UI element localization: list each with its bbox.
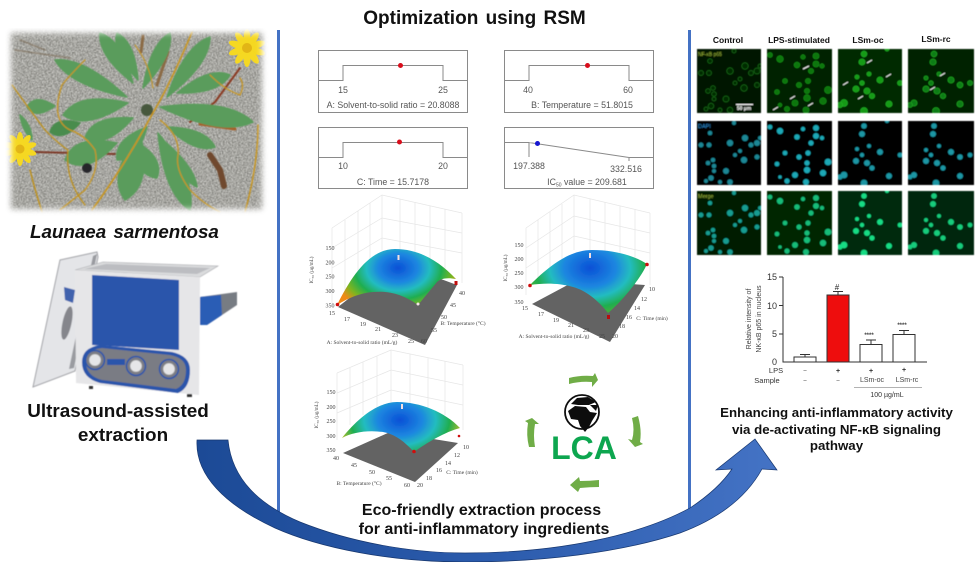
chart: response surface A vs B: 15	[329, 311, 335, 317]
micrograph: LSm-rc DAPI	[907, 120, 975, 186]
label: Ultrasound-assisted extraction: Ultrasound-assisted	[27, 401, 209, 422]
chart: response surface A vs B: 19	[360, 322, 366, 328]
bar: LSm-rc: ****	[897, 323, 907, 329]
chart: response surface A vs C: 350	[514, 300, 524, 306]
chart: response surface A vs C	[504, 195, 668, 342]
bar chart: NF-kB p65 nuclear intensity: 0	[772, 357, 777, 367]
x-axis factor table	[754, 366, 922, 399]
chart: response surface B vs C: 12	[454, 453, 460, 459]
chart: response surface A vs C: 18	[619, 324, 625, 330]
chart: response surface B vs C: 20	[417, 483, 423, 489]
control panel with knobs	[82, 345, 192, 397]
x-axis factor table: LSm-oc	[860, 377, 885, 384]
chart: response surface A vs B: 45	[450, 303, 456, 309]
chart: response surface B vs C: 200	[326, 405, 336, 411]
chart: response surface A vs C: 10	[649, 287, 655, 293]
chart: response surface B vs C: 14	[445, 461, 451, 467]
chart: response surface A vs C: 300	[514, 285, 524, 291]
chart: response surface B vs C: 16	[436, 468, 442, 474]
chart: response surface A vs C: IC₅₀ (µg/mL)	[504, 254, 509, 281]
bar: LSm-oc: ****	[864, 333, 874, 339]
bar: LPS	[827, 283, 849, 362]
bar: LPS: #	[835, 283, 840, 292]
chart: response surface B vs C: B: Temperature (°C)	[336, 480, 382, 487]
chart: response surface A vs C: A: Solvent-to-solid ratio (mL/g)	[519, 333, 590, 340]
x-axis factor table: +	[836, 368, 840, 375]
tank body	[75, 262, 218, 395]
chart: response surface A vs B: 17	[344, 317, 350, 323]
caption: anti-inflammatory activity: pathway	[810, 438, 864, 453]
micrograph: LSm-oc DAPI	[837, 120, 903, 186]
bar: control	[794, 354, 816, 362]
caption: eco-friendly process	[359, 502, 609, 538]
x-axis factor table: −	[803, 378, 807, 385]
chart: response surface A vs B: 60	[421, 339, 427, 345]
chart: response surface B vs C: IC₅₀ (µg/mL)	[315, 401, 320, 428]
chart: response surface A vs B: 250	[326, 274, 334, 280]
chart: response surface A vs B: 23	[392, 333, 398, 339]
panel: desirability A: 15	[338, 85, 348, 95]
panel: desirability B: 60	[623, 85, 633, 95]
x-axis factor table: LPS	[769, 366, 783, 375]
panel: desirability A	[318, 50, 468, 112]
micrograph: LSm-rc NF-kB	[907, 48, 975, 114]
chart: response surface A vs B: 200	[326, 260, 334, 266]
x-axis factor table: Sample	[754, 376, 780, 385]
chart: response surface A vs C: C: Time (min)	[636, 315, 668, 322]
chart: response surface A vs C: 16	[626, 315, 632, 321]
chart: response surface B vs C: 250	[326, 419, 336, 425]
micrograph: LSm-oc merge	[837, 190, 903, 256]
caption: eco-friendly process: for anti-inflammatory ingredients	[359, 521, 609, 538]
label: Ultrasound-assisted extraction: extraction	[78, 425, 168, 446]
panel: desirability A: A: Solvent-to-solid ratio = 20.8088	[327, 100, 459, 110]
chart: response surface B vs C: 350	[326, 448, 336, 454]
panel: desirability IC50: 50	[556, 182, 562, 188]
column headings for microscopy	[713, 34, 951, 45]
chart: response surface B vs C: 60	[404, 483, 410, 489]
illustration: ultrasonic bath	[33, 252, 237, 397]
chart: response surface A vs C: 250	[514, 271, 524, 277]
x-axis factor table: −	[803, 368, 807, 375]
arrow: cycle top	[569, 373, 598, 387]
icon: yellow flower	[228, 29, 266, 67]
chart: response surface A vs B: 55	[431, 328, 437, 334]
panel: desirability C: C: Time = 15.7178	[357, 177, 429, 187]
chart: response surface A vs B: IC₅₀ (µg/mL)	[310, 256, 315, 283]
micrograph: control NF-kB: NF-κB p65	[698, 52, 722, 58]
column headings for microscopy: LPS-stimulated	[768, 35, 830, 45]
panel: desirability C: 20	[438, 161, 448, 171]
bar chart: NF-kB p65 nuclear intensity: NK-κB p65 in nucleus	[756, 285, 763, 353]
panel: desirability C	[318, 128, 468, 188]
chart: response surface A vs B: 21	[375, 327, 381, 333]
chart: response surface B vs C: 300	[326, 434, 336, 440]
chart: response surface A vs C: 17	[538, 312, 544, 318]
micrograph: LSm-oc NF-kB	[837, 48, 903, 114]
chart: response surface A vs B: 300	[326, 289, 334, 295]
micrograph: control merge	[696, 190, 762, 256]
chart: response surface A vs B: A: Solvent-to-solid ratio (mL/g)	[327, 339, 398, 346]
LCA label: LCA	[551, 430, 617, 466]
title: Optimization using RSM: Optimization using RSM	[363, 8, 586, 29]
panel: desirability B: 40	[523, 85, 533, 95]
chart: response surface A vs B: 150	[326, 246, 334, 252]
chart: response surface B vs C: C: Time (min)	[446, 469, 478, 476]
chart: response surface A vs C: 23	[583, 328, 589, 334]
column headings for microscopy: Control	[713, 35, 743, 45]
panel: desirability IC50: 332.516	[610, 164, 642, 174]
micrograph: LPS NF-kB	[766, 48, 833, 114]
curved process arrow	[197, 439, 777, 562]
photo: Launaea sarmentosa plant	[3, 28, 270, 216]
panel: desirability B: B: Temperature = 51.8015	[531, 100, 633, 110]
x-axis factor table: +	[902, 367, 906, 374]
bar chart: NF-kB p65 nuclear intensity: 15	[767, 272, 777, 282]
bar chart: NF-kB p65 nuclear intensity	[746, 272, 927, 399]
divider line: left	[277, 30, 280, 520]
panel: desirability IC50	[504, 128, 654, 188]
chart: response surface A vs C: 20	[612, 334, 618, 340]
panel: desirability C: 10	[338, 161, 348, 171]
chart: response surface B vs C: 10	[463, 445, 469, 451]
chart: response surface A vs B	[310, 195, 486, 346]
chart: response surface A vs C: 21	[568, 323, 574, 329]
chart: response surface A vs B: 40	[459, 291, 465, 297]
panel: desirability IC50: value = 209.681	[562, 177, 627, 187]
arrow: cycle right	[628, 416, 643, 447]
arrow: cycle bottom	[570, 477, 599, 492]
chart: response surface A vs B: 350	[326, 304, 334, 310]
micrograph: LPS merge	[766, 190, 833, 256]
bar chart: NF-kB p65 nuclear intensity: 5	[772, 329, 777, 339]
micrograph: control NF-kB: 50 µm	[737, 106, 752, 112]
panel: desirability B	[504, 50, 654, 112]
chart: response surface A vs C: 15	[522, 306, 528, 312]
chart: response surface B vs C: 150	[326, 390, 336, 396]
chart: response surface A vs C: 19	[553, 318, 559, 324]
chart: response surface A vs B: 50	[441, 315, 447, 321]
bar chart: NF-kB p65 nuclear intensity: Relative intensity of	[746, 289, 753, 349]
panel: desirability IC50: 197.388	[513, 161, 545, 171]
chart: response surface B vs C: 18	[426, 476, 432, 482]
chart: response surface A vs B: B: Temperature (°C)	[440, 320, 486, 327]
bar chart: NF-kB p65 nuclear intensity: 10	[767, 301, 777, 311]
caption: eco-friendly process: Eco-friendly extraction process	[362, 502, 601, 519]
chart: response surface A vs C: 150	[514, 243, 524, 249]
arrow: cycle left	[525, 418, 539, 447]
caption: anti-inflammatory activity	[720, 405, 953, 453]
x-axis factor table: 100 µg/mL	[870, 392, 904, 399]
icon: yellow flower, left	[6, 132, 36, 166]
right handle	[200, 292, 237, 325]
chart: response surface A vs C: 25	[599, 334, 605, 340]
chart: response surface A vs C: 14	[634, 306, 640, 312]
chart: response surface B vs C	[315, 350, 478, 489]
chart: response surface A vs C: 200	[514, 257, 524, 263]
panel: desirability A: 25	[438, 85, 448, 95]
micrograph: control NF-kB	[696, 48, 762, 114]
label: Ultrasound-assisted extraction	[27, 401, 209, 446]
bar: LSm-rc	[893, 323, 915, 362]
chart: response surface B vs C: 45	[351, 463, 357, 469]
micrograph: LPS DAPI	[766, 120, 833, 186]
divider line: right	[688, 30, 691, 515]
bar: LSm-oc	[860, 333, 882, 362]
x-axis factor table: +	[869, 368, 873, 375]
micrographs grid	[697, 47, 974, 256]
micrograph: control DAPI: DAPI	[698, 124, 711, 130]
panel: desirability IC50: IC	[547, 177, 556, 187]
micrograph: LSm-rc merge	[907, 190, 975, 256]
chart: response surface B vs C: 55	[386, 476, 392, 482]
chart: response surface B vs C: 40	[333, 456, 339, 462]
chart: response surface A vs C: 12	[641, 297, 647, 303]
blue front panel	[92, 275, 179, 350]
lid of ultrasonic bath	[33, 252, 98, 387]
LCA cycle diagram	[525, 373, 643, 492]
x-axis factor table: LSm-rc	[896, 377, 919, 384]
caption: anti-inflammatory activity: Enhancing anti-inflammatory activity	[720, 405, 953, 420]
column headings for microscopy: LSm-rc	[921, 34, 951, 44]
x-axis factor table: −	[836, 378, 840, 385]
micrograph: control merge: Merge	[698, 194, 714, 200]
caption: anti-inflammatory activity: via de-activating NF-κB signaling	[732, 422, 941, 437]
column headings for microscopy: LSm-oc	[852, 35, 884, 45]
icon: globe	[565, 395, 599, 432]
micrograph: control DAPI	[696, 120, 762, 186]
chart: response surface A vs B: 25	[408, 339, 414, 345]
chart: response surface B vs C: 50	[369, 470, 375, 476]
species name label: Launaea sarmentosa	[30, 221, 219, 242]
